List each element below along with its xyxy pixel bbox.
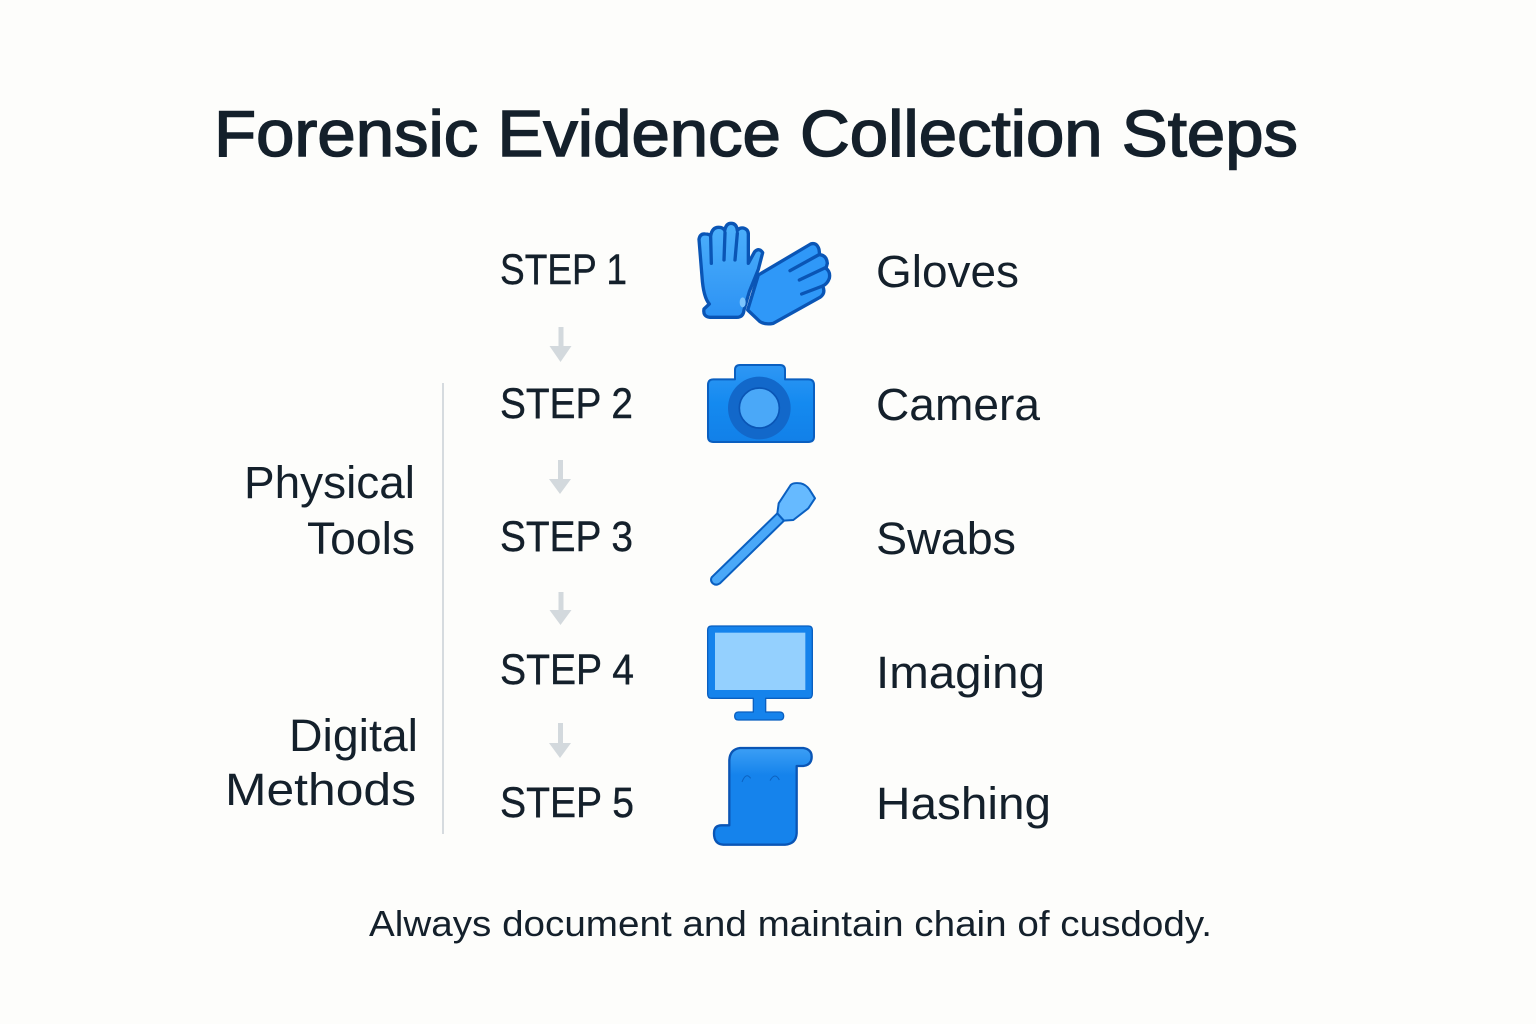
item labels: Camera bbox=[876, 379, 1041, 430]
group label: Physical Tools bbox=[244, 457, 415, 564]
group label: Digital Methods: Methods bbox=[225, 764, 416, 815]
arrows between steps bbox=[549, 327, 572, 758]
step labels: STEP 3 bbox=[500, 514, 633, 561]
step labels bbox=[500, 247, 634, 827]
footer note: Always document and maintain chain of cusdody. bbox=[369, 903, 1212, 944]
icon: camera bbox=[708, 365, 814, 442]
bracket line bbox=[442, 383, 444, 834]
item labels: Swabs bbox=[876, 513, 1016, 564]
group label: Digital Methods: Digital bbox=[289, 710, 418, 761]
icon: gloves bbox=[699, 223, 830, 324]
item labels: Hashing bbox=[876, 778, 1051, 829]
group label: Physical Tools: Tools bbox=[307, 513, 415, 564]
icon: scroll bbox=[714, 748, 812, 845]
item labels: Imaging bbox=[876, 647, 1045, 698]
item labels bbox=[876, 246, 1051, 829]
group label: Physical Tools: Physical bbox=[244, 457, 415, 508]
arrow 4 bbox=[549, 723, 571, 758]
group label: Digital Methods bbox=[225, 710, 418, 815]
arrow 2 bbox=[549, 460, 571, 494]
arrow 1 bbox=[550, 327, 572, 362]
step labels: STEP 1 bbox=[500, 247, 627, 294]
arrow 3 bbox=[550, 592, 572, 625]
step labels: STEP 2 bbox=[500, 381, 633, 428]
icon: swab bbox=[711, 483, 815, 585]
step labels: STEP 5 bbox=[500, 780, 634, 827]
title: Forensic Evidence Collection Steps bbox=[214, 97, 1298, 170]
icon: monitor bbox=[708, 626, 812, 720]
item labels: Gloves bbox=[876, 246, 1019, 297]
step labels: STEP 4 bbox=[500, 647, 634, 694]
